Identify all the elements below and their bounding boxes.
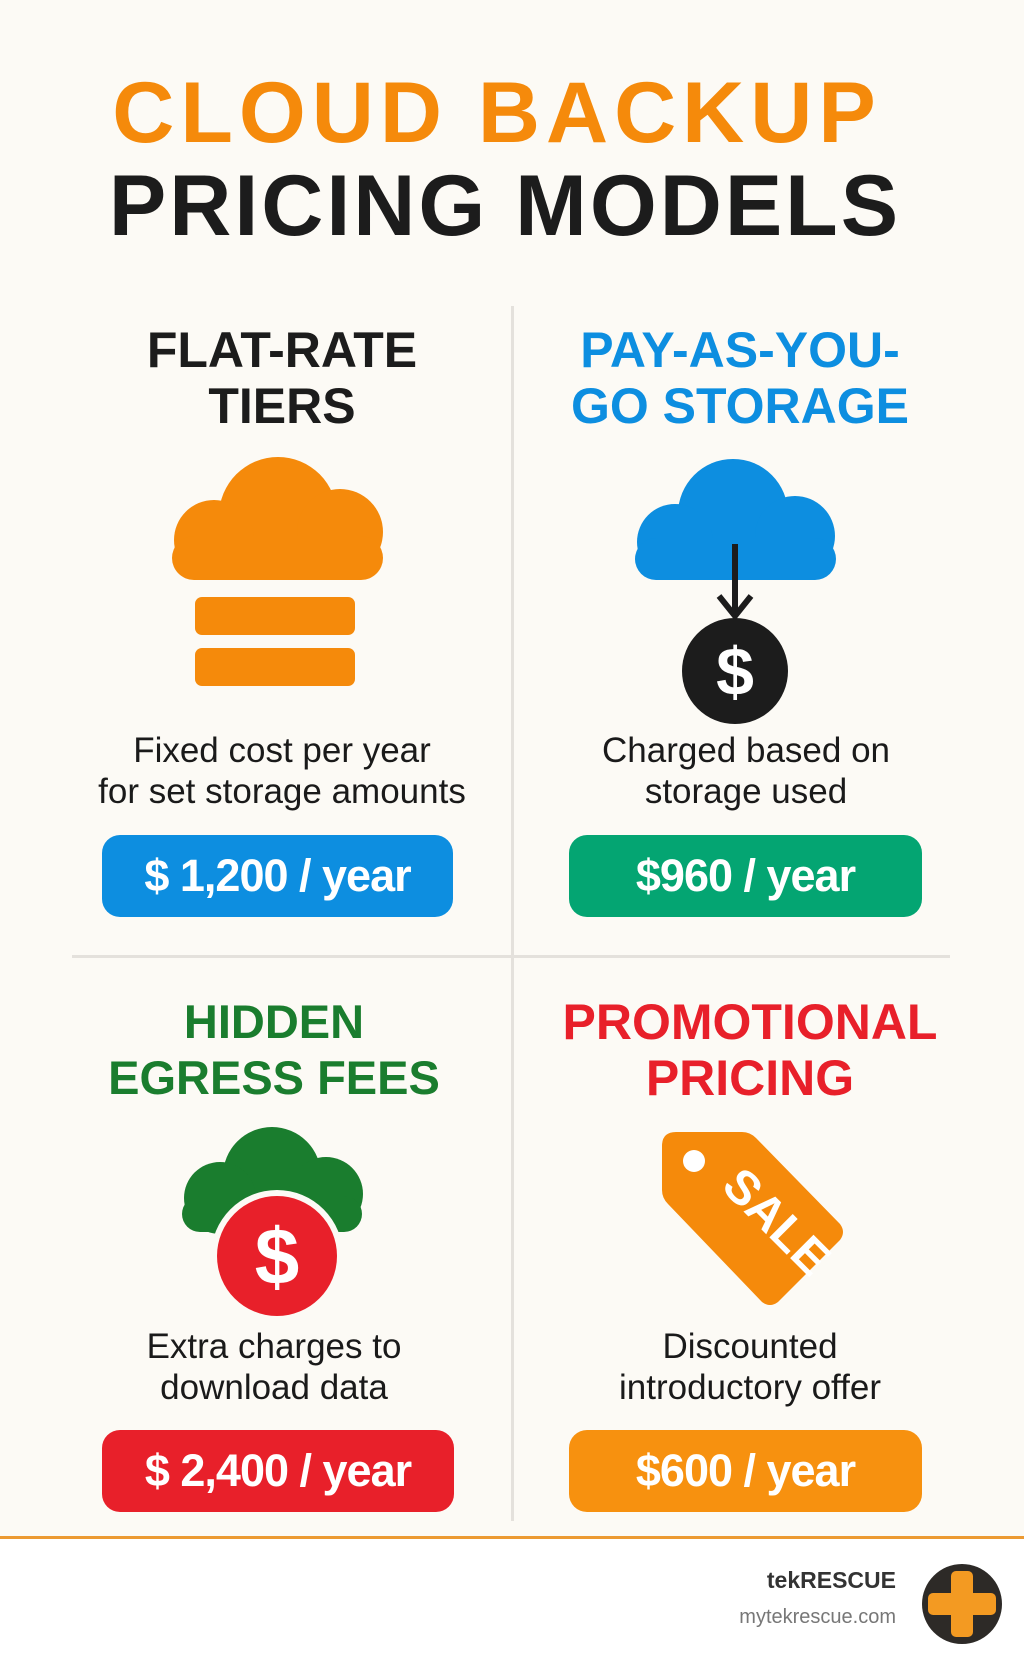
description	[98, 731, 466, 811]
heading: PAY-AS-YOU-	[580, 322, 900, 378]
icon: blue cloud with arrow and coin: $	[716, 634, 754, 710]
heading: HIDDEN	[184, 995, 364, 1048]
icon: green cloud with red coin: $	[255, 1212, 299, 1301]
title	[109, 65, 901, 254]
icon: green cloud with red coin	[182, 1127, 363, 1316]
heading: TIERS	[208, 378, 356, 434]
price button: $600 / year	[636, 1445, 855, 1496]
heading: EGRESS FEES	[108, 1051, 440, 1104]
description: Extra charges to	[147, 1327, 401, 1366]
icon: sale tag	[662, 1132, 843, 1305]
price button	[569, 1430, 922, 1512]
icon: blue cloud with arrow and coin	[635, 459, 836, 724]
footer	[0, 1536, 1024, 1666]
heading: FLAT-RATE	[147, 322, 417, 378]
heading	[108, 995, 440, 1104]
description	[619, 1327, 881, 1407]
description: introductory offer	[619, 1368, 881, 1407]
panel: promotional pricing	[562, 994, 937, 1512]
heading: PRICING	[646, 1050, 854, 1106]
heading	[571, 322, 909, 434]
price button: $960 / year	[636, 850, 855, 901]
panel: pay-as-you-go	[569, 322, 922, 917]
price button	[102, 1430, 454, 1512]
brand text: tekRESCUE	[767, 1567, 896, 1593]
price button: $ 1,200 / year	[144, 850, 411, 901]
panel: flat-rate tiers	[98, 322, 466, 917]
icon: logo	[922, 1564, 1002, 1644]
price button	[569, 835, 922, 917]
description: Discounted	[662, 1327, 838, 1366]
title: CLOUD BACKUP	[112, 65, 882, 161]
icon: orange cloud with bars	[172, 457, 383, 686]
description: Fixed cost per year	[133, 731, 431, 770]
price button: $ 2,400 / year	[145, 1445, 411, 1496]
description: for set storage amounts	[98, 772, 466, 811]
description	[602, 731, 890, 811]
title: PRICING MODELS	[109, 158, 901, 254]
heading: PROMOTIONAL	[562, 994, 937, 1050]
price button	[102, 835, 453, 917]
description	[147, 1327, 401, 1407]
description: storage used	[645, 772, 847, 811]
heading	[147, 322, 417, 434]
description: download data	[160, 1368, 388, 1407]
heading	[562, 994, 937, 1106]
panel: hidden egress fees	[102, 995, 454, 1512]
brand text	[739, 1567, 896, 1628]
description: Charged based on	[602, 731, 890, 770]
brand text: mytekrescue.com	[739, 1606, 896, 1628]
icon: sale tag: SALE	[712, 1158, 840, 1286]
heading: GO STORAGE	[571, 378, 909, 434]
